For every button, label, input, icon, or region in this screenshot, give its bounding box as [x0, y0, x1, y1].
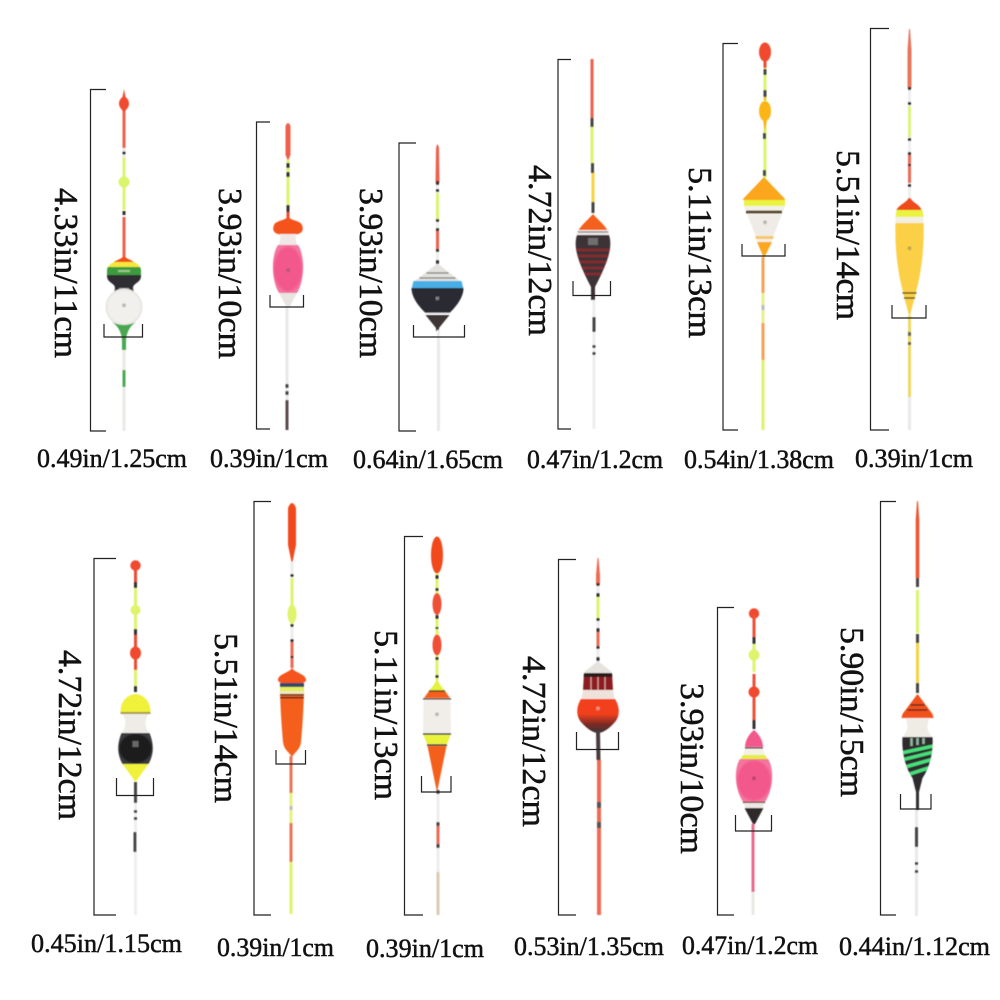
panel: float 2 group [210, 122, 328, 473]
float 6: 伴 [908, 245, 912, 251]
width bracket 1 [104, 324, 142, 337]
height bracket 6 [870, 28, 889, 430]
float 1: 伴 [122, 302, 126, 308]
panel: float 8 group [207, 502, 334, 962]
panel: float 1 group [37, 89, 187, 473]
float 9 [423, 536, 451, 915]
width bracket 11 [736, 815, 772, 831]
float 5: 伴 [763, 219, 767, 225]
width bracket 7 [116, 778, 154, 796]
height label 6: 5.51in/14cm [829, 150, 866, 320]
float 9: 伴 [435, 711, 439, 717]
height bracket 8 [254, 502, 271, 915]
height bracket 4 [558, 60, 571, 429]
width bracket 9 [422, 776, 451, 792]
width label 5: 0.54in/1.38cm [684, 445, 834, 474]
width label 6: 0.39in/1cm [855, 444, 973, 473]
width bracket 6 [892, 305, 926, 318]
height label 11: 3.93in/10cm [673, 683, 710, 854]
float 12 [900, 501, 936, 916]
height label 2: 3.93in/10cm [211, 188, 248, 359]
panel: float 12 group [833, 501, 990, 961]
width label 12: 0.44in/1.12cm [839, 932, 990, 961]
height bracket 7 [94, 558, 116, 915]
height label 10: 4.72in/12cm [515, 656, 552, 827]
height label 1: 4.33in/11cm [47, 188, 84, 358]
float 6 [895, 29, 924, 430]
height label 9: 5.11in/13cm [367, 630, 404, 800]
width bracket 8 [276, 750, 306, 764]
width label 4: 0.47in/1.2cm [527, 445, 663, 474]
height bracket 3 [399, 143, 416, 431]
float 8 [277, 503, 307, 914]
height bracket 12 [880, 502, 896, 915]
width label 11: 0.47in/1.2cm [682, 931, 818, 960]
panel: float 7 group [31, 558, 182, 958]
float 5 [743, 42, 785, 430]
panel: float 4 group [521, 59, 663, 474]
width label 2: 0.39in/1cm [210, 444, 328, 473]
panel: float 6 group [829, 28, 973, 473]
height bracket 2 [256, 122, 270, 429]
height bracket 9 [404, 536, 423, 915]
width bracket 10 [576, 732, 618, 750]
float 10 [577, 558, 619, 915]
panel: float 9 group [366, 536, 484, 963]
height label 5: 5.11in/13cm [681, 167, 718, 338]
float 2: 伴 [286, 267, 290, 273]
width label 10: 0.53in/1.35cm [514, 932, 664, 961]
height bracket 10 [558, 560, 576, 915]
height bracket 1 [90, 90, 106, 431]
width label 8: 0.39in/1cm [217, 933, 334, 962]
width bracket 12 [900, 794, 931, 809]
height label 3: 3.93in/10cm [352, 188, 389, 358]
height bracket 11 [718, 608, 734, 915]
float 2 [273, 123, 303, 430]
height label 7: 4.72in/12cm [51, 650, 88, 820]
panel: float 3 group [352, 143, 503, 474]
height label 8: 5.51in/14cm [207, 633, 244, 803]
float 4 [574, 58, 612, 429]
panel: float 5 group [681, 42, 834, 474]
width bracket 2 [270, 295, 304, 307]
width label 1: 0.49in/1.25cm [37, 444, 187, 473]
height label 12: 5.90in/15cm [833, 627, 870, 797]
float 10: 伴 [596, 705, 600, 711]
width bracket 4 [573, 281, 610, 296]
width label 7: 0.45in/1.15cm [31, 929, 182, 958]
width label 3: 0.64in/1.65cm [353, 445, 503, 474]
float 1 [104, 89, 144, 431]
float 11 [736, 608, 772, 915]
float 7 [118, 560, 153, 915]
width bracket 5 [742, 244, 785, 256]
panel: float 11 group [673, 608, 818, 960]
height bracket 5 [723, 44, 738, 430]
float 3 [412, 144, 464, 431]
panel: float 10 group [514, 558, 664, 961]
width bracket 3 [414, 325, 464, 337]
float 3: 伴 [436, 295, 440, 301]
height label 4: 4.72in/12cm [521, 165, 558, 336]
float 11: 伴 [752, 775, 756, 781]
width label 9: 0.39in/1cm [366, 934, 484, 963]
